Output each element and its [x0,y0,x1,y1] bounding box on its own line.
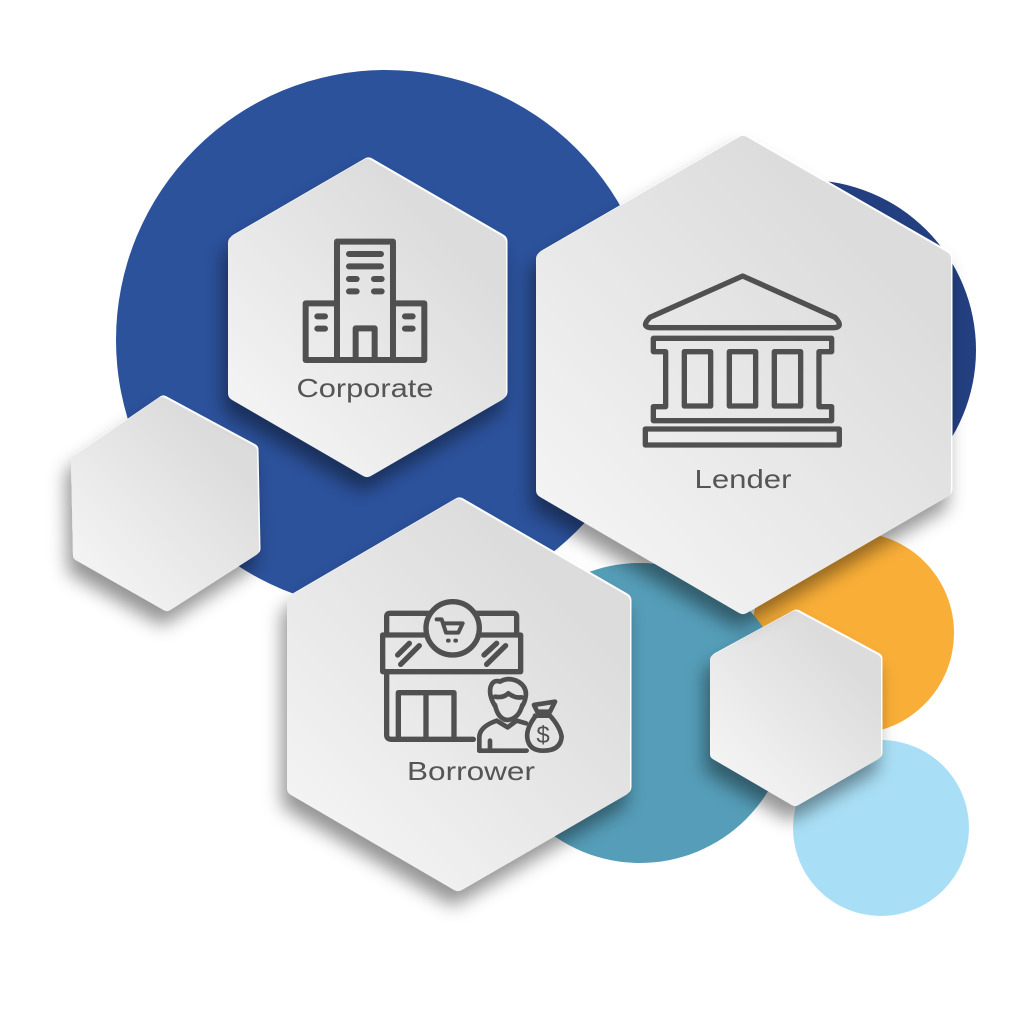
panel: corporate [236,166,500,469]
circle: teal [490,563,790,863]
label: lender: Lender [694,464,792,494]
label: corporate: Corporate [296,373,434,403]
hexagon: corporate [236,166,500,469]
circle: dark navy [636,180,976,520]
circle: orange [752,532,954,734]
hexagon: borrower [295,506,624,883]
panel: borrower [295,506,624,883]
label: borrower: Borrower [407,756,535,786]
icon: office buildings [306,242,424,360]
icon: dollar sign: $ [536,722,550,749]
icon: bank [645,276,839,445]
icon: shop with owner and money bag [383,602,562,751]
circle: large blue [116,70,656,610]
hexagon: lender [544,142,944,606]
circle: light blue [793,740,969,916]
hexagon: blank left [77,402,254,605]
hexagon: blank right [716,616,876,800]
panel: lender [544,142,944,606]
